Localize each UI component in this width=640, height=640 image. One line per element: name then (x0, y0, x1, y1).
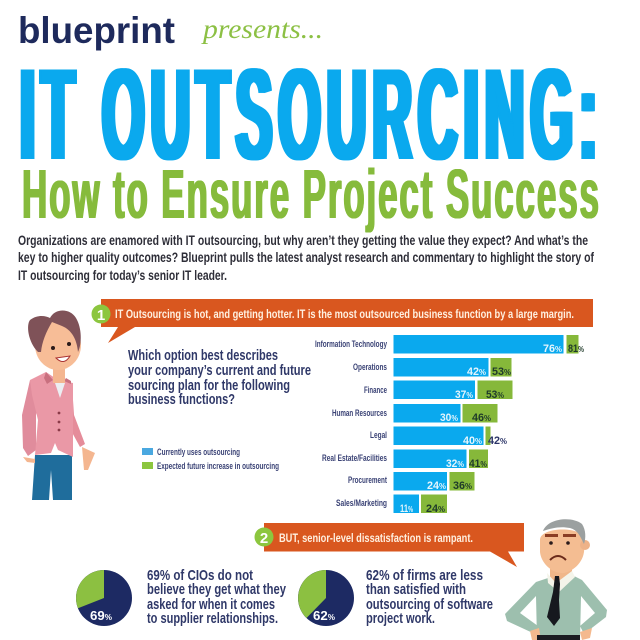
chart legend (142, 447, 279, 471)
row: Real Estate/Facilities: 32% (446, 458, 464, 470)
chart legend: Currently uses outsourcing (157, 447, 240, 457)
row: Information Technology: 81% (568, 343, 584, 355)
stat text 69%: to supplier relationships. (147, 610, 278, 627)
chart legend: Expected future increase in outsourcing (157, 461, 279, 471)
stat text 62%: project work. (366, 610, 435, 627)
row: Human Resources (332, 404, 498, 424)
stat text 69% (147, 567, 286, 627)
row: Sales/Marketing: 11% (400, 503, 413, 515)
banner 2 text: BUT, senior-level dissatisfaction is rampant. (279, 531, 473, 545)
icon: frowning man character (505, 519, 607, 640)
row: Human Resources: 30% (440, 412, 458, 424)
stat text 62% (366, 567, 493, 627)
intro paragraph: IT outsourcing for today’s senior IT leader. (18, 267, 227, 283)
row: Operations: 42% (467, 366, 486, 378)
badge: number 1: 1 (97, 307, 105, 324)
stat text 62%: than satisfied with (366, 581, 466, 598)
survey question: Which option best describes (128, 347, 278, 364)
pie chart 62% (298, 570, 354, 626)
survey question: sourcing plan for the following (128, 377, 290, 394)
badge: number 2 (254, 528, 274, 547)
row: Legal (370, 426, 507, 447)
row: Information Technology (315, 335, 584, 355)
row: Human Resources: 46% (472, 412, 491, 424)
row: Finance: 53% (486, 389, 504, 401)
survey question: your company’s current and future (128, 362, 311, 379)
row: Finance: 37% (455, 389, 473, 401)
pie chart 62%: 62% (313, 608, 335, 623)
intro paragraph (18, 232, 594, 283)
row: Information Technology: Information Technology (315, 339, 387, 349)
logo: blueprint: blueprint (18, 10, 175, 51)
row: Procurement: 24% (427, 480, 446, 492)
icon: woman character (22, 310, 95, 500)
stat text 62%: outsourcing of software (366, 596, 493, 613)
stat text 69%: believe they get what they (147, 581, 286, 598)
row: Operations: 53% (492, 366, 511, 378)
presents script: presents... (201, 14, 323, 44)
row: Procurement: 36% (453, 480, 472, 492)
row: Legal: 42% (488, 435, 507, 447)
bar chart (315, 335, 584, 515)
stat text 62%: 62% of firms are less (366, 567, 483, 584)
row: Legal: 40% (463, 435, 482, 447)
row: Finance (364, 380, 512, 401)
row: Finance: Finance (364, 385, 387, 395)
survey question: business functions? (128, 391, 235, 408)
row: Operations (353, 358, 512, 378)
badge: number 2: 2 (260, 530, 268, 547)
row: Real Estate/Facilities: Real Estate/Facilities (322, 453, 387, 463)
stat text 69%: 69% of CIOs do not (147, 567, 253, 584)
survey question (128, 347, 311, 408)
banner 2 (254, 523, 524, 567)
banner 1 (92, 299, 593, 343)
row: Real Estate/Facilities (322, 450, 488, 470)
row: Human Resources: Human Resources (332, 408, 387, 418)
row: Procurement: Procurement (348, 475, 387, 485)
row: Sales/Marketing (336, 494, 447, 515)
row: Legal: Legal (370, 430, 387, 440)
stat text 69%: asked for when it comes (147, 596, 275, 613)
row: Operations: Operations (353, 362, 387, 372)
row: Sales/Marketing: 24% (426, 503, 445, 515)
subtitle: How to Ensure Project Success (22, 155, 601, 233)
pie chart 69% (76, 570, 132, 626)
badge: number 1 (92, 304, 110, 324)
row: Sales/Marketing: Sales/Marketing (336, 498, 387, 508)
row: Real Estate/Facilities: 41% (469, 458, 487, 470)
row: Information Technology: 76% (543, 343, 562, 355)
pie chart 69%: 69% (90, 608, 112, 623)
title: IT OUTSOURCING: (20, 41, 603, 187)
row: Procurement (348, 472, 474, 492)
